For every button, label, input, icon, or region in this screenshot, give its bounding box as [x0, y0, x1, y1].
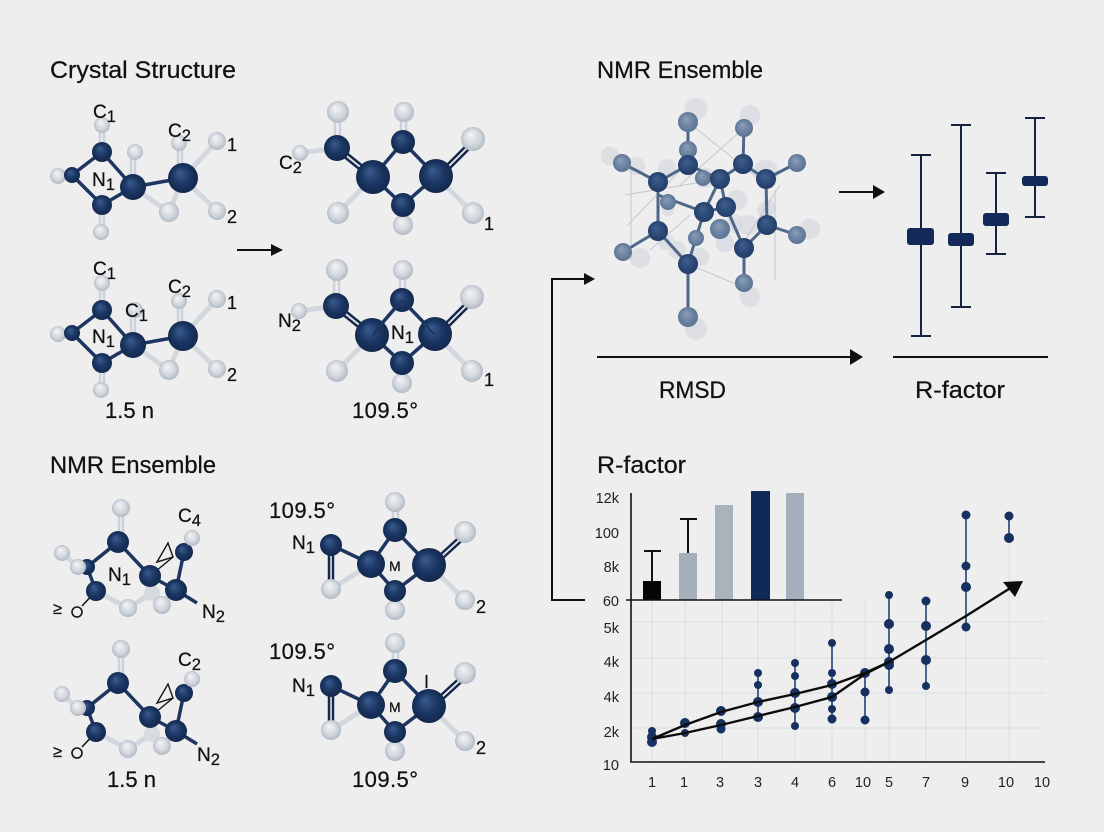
trend lines and arrow	[652, 581, 1023, 739]
heading: NMR Ensemble right: NMR Ensemble	[597, 57, 763, 84]
x axis labels: 9	[961, 775, 969, 791]
y axis labels: 60	[603, 594, 619, 610]
y axis labels: 2k	[604, 725, 620, 741]
x axis labels: 10	[1034, 775, 1050, 791]
x axis labels: 5	[885, 775, 893, 791]
x axis labels: 10	[998, 775, 1014, 791]
molecule: crystal structure bottom right: N	[278, 311, 292, 332]
molecule: crystal structure top left: 2	[182, 127, 191, 145]
molecule: crystal structure bottom left: C	[93, 259, 107, 280]
molecule: crystal structure top left: C	[93, 102, 107, 123]
heading: NMR Ensemble left: NMR Ensemble	[50, 452, 216, 479]
molecule: crystal structure bottom left: N	[92, 327, 106, 348]
heading: R-factor chart: R-factor	[597, 452, 686, 479]
molecule: NMR bottom left: C	[178, 650, 192, 671]
axis line: R-factor	[893, 356, 1048, 358]
molecule: NMR top right: 2	[476, 597, 486, 617]
molecule: crystal structure bottom left: 2	[182, 283, 191, 301]
molecule: crystal structure bottom right: 1	[405, 329, 414, 347]
molecule: crystal structure bottom right: N	[391, 323, 405, 344]
x axis labels: 7	[922, 775, 930, 791]
value: 109.5 degrees NMR middle: 109.5°	[269, 639, 335, 664]
x axis labels: 3	[754, 775, 762, 791]
x axis labels: 1	[680, 775, 688, 791]
molecule: crystal structure top left	[50, 102, 237, 240]
x axis labels: 10	[855, 775, 871, 791]
molecule: NMR top right: N	[292, 533, 306, 554]
molecule: crystal structure bottom left: C	[125, 301, 139, 322]
molecule: crystal structure bottom right	[278, 259, 494, 393]
molecule: NMR top left: 4	[192, 512, 201, 530]
value: 109.5 degrees NMR bottom: 109.5°	[352, 767, 418, 792]
value: 1.5 n: 1.5 n	[105, 398, 154, 423]
y axis labels	[595, 491, 620, 774]
molecule: crystal structure top left: 1	[107, 108, 116, 126]
heading: Crystal Structure: Crystal Structure	[50, 57, 236, 84]
molecule: crystal structure bottom left: 1	[227, 293, 237, 313]
molecule: NMR bottom left: 2	[211, 751, 220, 769]
molecule: crystal structure bottom right: 1	[484, 370, 494, 390]
data stems	[758, 515, 1009, 726]
molecule: crystal structure top left: C	[168, 121, 182, 142]
axis arrow: RMSD	[597, 349, 863, 365]
molecule: crystal structure top right: 1	[484, 214, 494, 234]
value: 109.5 degrees NMR top: 109.5°	[269, 498, 335, 523]
molecule: NMR top left	[53, 499, 225, 626]
molecule: crystal structure bottom left: 1	[107, 265, 116, 283]
molecule: crystal structure top right: 2	[293, 159, 302, 177]
molecule: crystal structure top right	[279, 101, 494, 235]
molecule: NMR top right	[292, 492, 486, 620]
molecule: NMR top left: 1	[122, 571, 131, 589]
y axis labels: 10	[603, 758, 619, 774]
molecule: NMR bottom left: ≥	[53, 743, 62, 761]
x axis labels: 4	[791, 775, 799, 791]
molecule: crystal structure top left: 2	[227, 207, 237, 227]
molecule: NMR top left: ≥	[53, 600, 62, 618]
value: 1.5 n NMR: 1.5 n	[107, 767, 156, 792]
error bar chart	[907, 118, 1048, 336]
molecule: NMR top left: 2	[216, 608, 225, 626]
molecule: NMR bottom left: N	[197, 745, 211, 766]
axes	[626, 493, 1045, 762]
molecule: NMR bottom left: 2	[192, 656, 201, 674]
bars	[643, 491, 804, 600]
y axis labels: 100	[595, 526, 619, 542]
molecule: crystal structure top right: C	[279, 153, 293, 174]
value: 109.5 degrees crystal: 109.5°	[352, 398, 418, 423]
molecule: crystal structure bottom left: 1	[106, 333, 115, 351]
arrow: ensemble to error bars	[839, 185, 885, 199]
y axis labels: 5k	[604, 621, 620, 637]
molecule: crystal structure top left: 1	[227, 135, 237, 155]
y axis labels: 8k	[604, 560, 620, 576]
x axis labels	[648, 775, 1050, 791]
molecule: NMR top left: N	[108, 565, 122, 586]
molecule: crystal structure bottom left	[50, 259, 237, 398]
molecule: crystal structure bottom left: C	[168, 277, 182, 298]
molecule: NMR bottom right: 2	[476, 738, 486, 758]
molecule: NMR top left: N	[202, 602, 216, 623]
connector arrow: bottom chart to ensemble	[552, 273, 595, 600]
scatter and bar chart	[595, 491, 1050, 791]
molecule: NMR bottom right	[292, 633, 486, 761]
y axis labels: 4k	[604, 655, 620, 671]
molecule: NMR bottom left	[53, 640, 220, 769]
molecule: crystal structure bottom left: 2	[227, 365, 237, 385]
molecule: NMR bottom right: N	[292, 676, 306, 697]
molecule: NMR bottom right: 1	[306, 682, 315, 700]
x axis labels: 6	[828, 775, 836, 791]
arrow: crystal structure	[237, 244, 283, 256]
molecule: NMR bottom right: I	[424, 672, 429, 692]
molecule: NMR top right: M	[389, 558, 401, 574]
data points	[647, 510, 1014, 747]
molecule: overlaid ensemble	[601, 98, 820, 340]
x axis labels: 3	[716, 775, 724, 791]
y axis labels: 12k	[596, 491, 620, 507]
y axis labels: 4k	[604, 690, 620, 706]
molecule: NMR bottom right: M	[389, 699, 401, 715]
molecule: crystal structure top left: 1	[106, 176, 115, 194]
label: RMSD: RMSD	[659, 377, 726, 404]
molecule: crystal structure bottom left: 1	[139, 307, 148, 325]
label: R-factor: R-factor	[915, 377, 1005, 404]
molecule: crystal structure top left: N	[92, 170, 106, 191]
molecule: NMR top left: C	[178, 506, 192, 527]
x axis labels: 1	[648, 775, 656, 791]
molecule: crystal structure bottom right: 2	[292, 317, 301, 335]
molecule: NMR top right: 1	[306, 539, 315, 557]
